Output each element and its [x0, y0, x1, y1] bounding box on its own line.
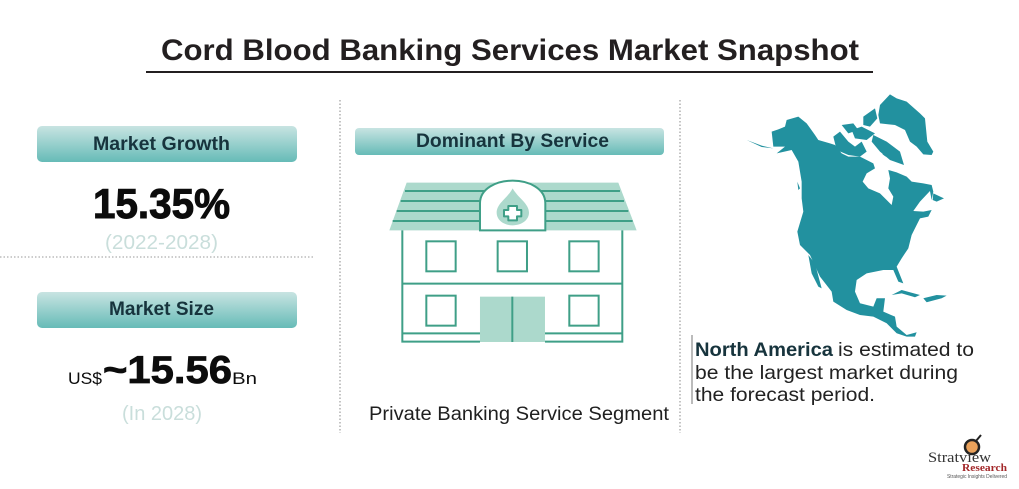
icon: magnifier — [965, 435, 981, 454]
growth period: (2022-2028) — [105, 232, 218, 254]
panel: market growth — [37, 126, 297, 254]
size value: ~15.56 — [103, 349, 232, 392]
icon: hospital building — [389, 181, 637, 342]
callout: north america — [691, 335, 974, 406]
dominant segment label: Private Banking Service Segment — [369, 404, 670, 425]
callout: north america: North America — [695, 339, 833, 361]
growth value: 15.35% — [93, 180, 230, 227]
heading: market size: Market Size — [109, 299, 214, 320]
logo: stratview research: Stratview — [928, 450, 991, 466]
callout: north america: be the largest market during — [695, 362, 958, 384]
size value: Bn — [232, 369, 257, 388]
map: north america — [747, 94, 947, 337]
callout: north america: the forecast period. — [695, 384, 875, 406]
heading: market growth — [37, 126, 297, 162]
title: Cord Blood Banking Services Market Snapshot — [161, 34, 859, 67]
logo: stratview research: Research — [962, 463, 1008, 474]
heading: market growth: Market Growth — [93, 134, 230, 155]
size value — [68, 349, 257, 392]
heading: market size — [37, 292, 297, 328]
heading: dominant by service — [355, 128, 664, 155]
logo: stratview research — [928, 435, 1008, 480]
panel: regional — [691, 94, 974, 406]
logo: stratview research: Strategic Insights Delivered — [947, 474, 1007, 480]
panel: dominant by service — [355, 128, 670, 425]
panel: market size — [37, 292, 297, 425]
size year: (In 2028) — [122, 403, 202, 425]
callout: north america: is estimated to — [838, 339, 974, 361]
size value: US$ — [68, 369, 103, 388]
heading: dominant by service: Dominant By Service — [416, 131, 609, 152]
